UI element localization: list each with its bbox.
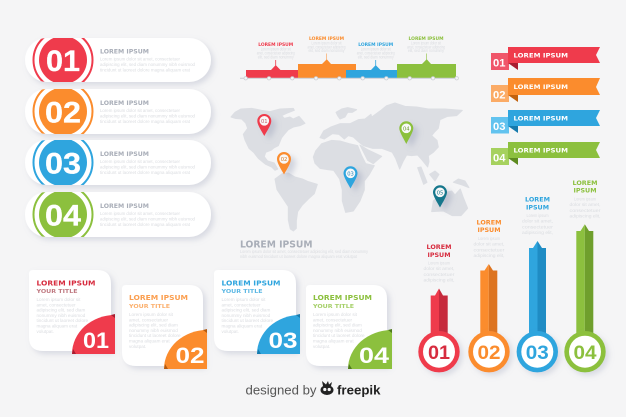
bar 02: 02 <box>478 342 501 364</box>
card 01: Lorem ipsum dolor sit <box>36 297 81 302</box>
timeline labels: LOREM IPSUM <box>258 42 294 48</box>
footer credit <box>246 381 381 398</box>
bar 02: consectetuer <box>474 247 505 252</box>
timeline labels <box>257 36 445 59</box>
bar 04: Lorem ipsum <box>574 196 596 202</box>
ribbon 02: 02 <box>493 90 506 102</box>
timeline labels: elit, sed diam nonummy <box>358 54 394 59</box>
card 01: 01 <box>83 328 109 353</box>
bar 03 <box>517 196 558 372</box>
panel: rising arrow bars <box>418 179 606 372</box>
card 03 <box>214 270 300 354</box>
card 01: YOUR TITLE <box>35 289 78 295</box>
card 04: 04 <box>359 343 390 368</box>
bar 03: LOREM <box>525 196 550 204</box>
card 02: LOREM IPSUM <box>129 294 188 302</box>
map caption: LOREM IPSUM <box>240 239 312 250</box>
pill 03: adipiscing elit, sed diam nonummy nibh euismod <box>100 164 195 170</box>
timeline axis with dots <box>240 77 458 80</box>
card 04: YOUR TITLE <box>312 304 355 310</box>
card 03: volutpat. <box>222 329 239 334</box>
pill 02: Lorem ipsum dolor sit amet, consectetuer <box>100 108 180 113</box>
pill 01: 01 <box>46 45 80 78</box>
ribbon 04: 04 <box>493 153 506 165</box>
card 02: nonummy nibh euismod <box>129 328 178 333</box>
card 03: nonummy nibh euismod <box>222 313 271 318</box>
pill 03: LOREM IPSUM <box>100 150 149 158</box>
bar 01 <box>418 243 460 372</box>
pill 01: adipiscing elit, sed diam nonummy nibh euismod <box>100 62 195 67</box>
pill 01 <box>25 38 216 86</box>
timeline labels: elit, sed diam nonummy <box>258 54 294 59</box>
card 01: amet, consectetuer <box>36 302 76 307</box>
map caption: Lorem ipsum dolor sit amet, consectetuer adipiscing elit, sed diam nonummy <box>240 249 369 254</box>
card 01: nonummy nibh euismod <box>36 313 86 318</box>
timeline labels: amet, consectetuer adipiscing <box>357 50 395 56</box>
card 01: volutpat. <box>36 329 54 334</box>
card 01 <box>29 270 115 354</box>
card 03: amet, consectetuer <box>222 302 261 307</box>
pill 02: LOREM IPSUM <box>100 99 149 107</box>
pill 02: 02 <box>45 96 81 130</box>
pin 04 <box>399 121 413 144</box>
pill 03: 03 <box>45 148 81 180</box>
bar 04: adipiscing elit, <box>570 214 600 219</box>
card 02: magna aliquam erat <box>129 338 170 344</box>
world map <box>231 103 469 231</box>
timeline labels: amet, consectetuer adipiscing <box>407 44 445 49</box>
card 04: volutpat. <box>313 344 330 349</box>
card 02: 02 <box>176 343 204 368</box>
card 04 <box>306 285 392 369</box>
panel: ribbons <box>491 47 600 165</box>
map caption <box>240 239 369 259</box>
card 04: Lorem ipsum dolor sit <box>313 312 358 317</box>
card 03: 03 <box>268 328 298 353</box>
pin 03 <box>344 166 358 188</box>
pill 04 <box>25 192 216 242</box>
ribbon 01: 01 <box>493 58 506 70</box>
bar 01: LOREM <box>426 243 452 251</box>
bar 02: IPSUM <box>478 226 500 234</box>
timeline labels: amet, consectetuer adipiscing <box>257 50 295 56</box>
timeline labels: LOREM IPSUM <box>408 36 444 42</box>
card 02: YOUR TITLE <box>128 304 171 310</box>
pill 04: Lorem ipsum dolor sit amet, consectetuer <box>100 211 180 216</box>
ribbon 04: LOREM IPSUM <box>514 147 568 154</box>
pill 01: LOREM IPSUM <box>100 48 149 56</box>
bar 04: IPSUM <box>574 186 596 194</box>
ribbon 02: LOREM IPSUM <box>514 84 568 91</box>
bar 02: dolor sit amet, <box>474 242 504 247</box>
pill 02 <box>25 89 216 138</box>
timeline labels: Lorem ipsum dolor sit <box>411 40 441 45</box>
card 04: LOREM IPSUM <box>313 294 372 302</box>
bar 01: adipiscing elit, <box>424 278 454 283</box>
pin 04: 04 <box>403 126 410 132</box>
card 04: magna aliquam erat <box>313 338 354 344</box>
bar 02: adipiscing elit, <box>474 253 504 258</box>
timeline labels: LOREM IPSUM <box>358 42 394 48</box>
bar 03: IPSUM <box>526 204 549 212</box>
ribbon 03 <box>491 110 600 134</box>
pill 02: tincidunt ut laoreet dolore magna aliquam erat <box>100 119 191 124</box>
pill 03: tincidunt ut laoreet dolore magna aliquam erat <box>100 170 191 175</box>
map caption: nibh euismod tincidunt ut laoreet dolore magna aliquam erat volutpat <box>240 254 358 259</box>
bar 01: dolor sit amet, <box>424 266 454 271</box>
card 03: adipiscing elit, sed diam <box>222 308 270 313</box>
panel: numbered pill list <box>25 30 211 244</box>
ribbon 02 <box>491 78 600 102</box>
bar 02: LOREM <box>476 218 502 226</box>
card 02 <box>122 285 207 369</box>
bar 02 <box>468 218 510 372</box>
card 01: adipiscing elit, sed diam <box>36 308 85 313</box>
card 04: nonummy nibh euismod <box>313 328 362 333</box>
map pins <box>257 114 447 208</box>
timeline labels: LOREM IPSUM <box>309 36 344 42</box>
footer credit: designed by <box>246 384 317 398</box>
bar 03: 03 <box>526 342 549 364</box>
card 04: adipiscing elit, sed diam <box>313 323 362 328</box>
card 03: Lorem ipsum dolor sit <box>222 297 266 302</box>
card 02: adipiscing elit, sed diam <box>129 323 178 328</box>
card 03: YOUR TITLE <box>220 289 263 295</box>
bar 03: adipiscing elit, <box>522 230 553 235</box>
bar 04 <box>564 179 606 372</box>
bar 03: dolor sit amet, <box>522 219 553 224</box>
pin 01: 01 <box>261 119 268 125</box>
timeline labels: elit, sed diam nonummy <box>408 48 445 53</box>
bar 01: 01 <box>428 342 450 364</box>
panel: timeline <box>240 36 458 80</box>
pin 03: 03 <box>347 171 354 177</box>
ribbon 03: 03 <box>493 121 506 133</box>
pin 01 <box>257 114 271 136</box>
card 02: volutpat. <box>129 344 146 349</box>
pill 01: Lorem ipsum dolor sit amet, consectetuer <box>100 56 180 62</box>
pill 01: tincidunt ut laoreet dolore magna aliquam erat <box>100 67 191 72</box>
bar 04: LOREM <box>572 179 598 187</box>
card 01: magna aliquam erat <box>36 324 78 328</box>
timeline labels: Lorem ipsum dolor sit <box>261 46 291 52</box>
pill 04: tincidunt ut laoreet dolore magna aliquam erat <box>100 222 191 227</box>
card 03: LOREM IPSUM <box>222 280 281 288</box>
bar 04: 04 <box>574 342 597 364</box>
pill 03: Lorem ipsum dolor sit amet, consectetuer <box>100 159 180 164</box>
footer credit: freepik <box>337 382 381 398</box>
bar 01: IPSUM <box>428 251 450 259</box>
timeline labels: Lorem ipsum dolor sit <box>312 40 342 45</box>
pin 02 <box>277 152 291 174</box>
timeline labels: Lorem ipsum dolor sit <box>361 46 391 52</box>
bar 03: consectetuer <box>522 224 554 229</box>
pill 03 <box>25 140 216 190</box>
pin 05 <box>433 185 447 208</box>
pill 04: 04 <box>45 200 81 232</box>
bar 02: Lorem ipsum <box>478 236 500 241</box>
bar 01: consectetuer <box>424 272 455 277</box>
card 02: tincidunt ut laoreet dolore <box>129 333 181 338</box>
card 04: amet, consectetuer <box>313 317 353 322</box>
icon: freepik logo <box>320 381 334 395</box>
ribbon 03: LOREM IPSUM <box>514 116 568 123</box>
card 03: magna aliquam erat <box>222 324 263 328</box>
bar 04: consectetuer <box>570 208 601 213</box>
card 01: tincidunt ut laoreet dolore <box>36 318 89 323</box>
pill 04: LOREM IPSUM <box>100 202 149 210</box>
card 03: tincidunt ut laoreet dolore <box>222 318 274 323</box>
ribbon 01 <box>491 47 600 70</box>
timeline labels: elit, sed diam nonummy <box>308 48 345 53</box>
card 02: amet, consectetuer <box>129 317 169 322</box>
bar 04: dolor sit amet, <box>570 202 600 207</box>
bar 03: Lorem ipsum <box>526 213 549 218</box>
timeline bars <box>246 54 456 78</box>
pin 02: 02 <box>281 157 287 163</box>
bar 01: Lorem ipsum <box>428 260 450 266</box>
ribbon 01: LOREM IPSUM <box>514 53 568 60</box>
card 01: LOREM IPSUM <box>36 280 96 288</box>
ribbon 04 <box>491 142 600 165</box>
timeline labels: amet, consectetuer adipiscing <box>308 44 346 49</box>
pill 02: adipiscing elit, sed diam nonummy nibh euismod <box>100 114 195 118</box>
pin 05: 05 <box>437 190 443 196</box>
pill 04: adipiscing elit, sed diam nonummy nibh euismod <box>100 216 195 222</box>
card 04: tincidunt ut laoreet dolore <box>313 333 365 338</box>
card 02: Lorem ipsum dolor sit <box>129 312 174 317</box>
